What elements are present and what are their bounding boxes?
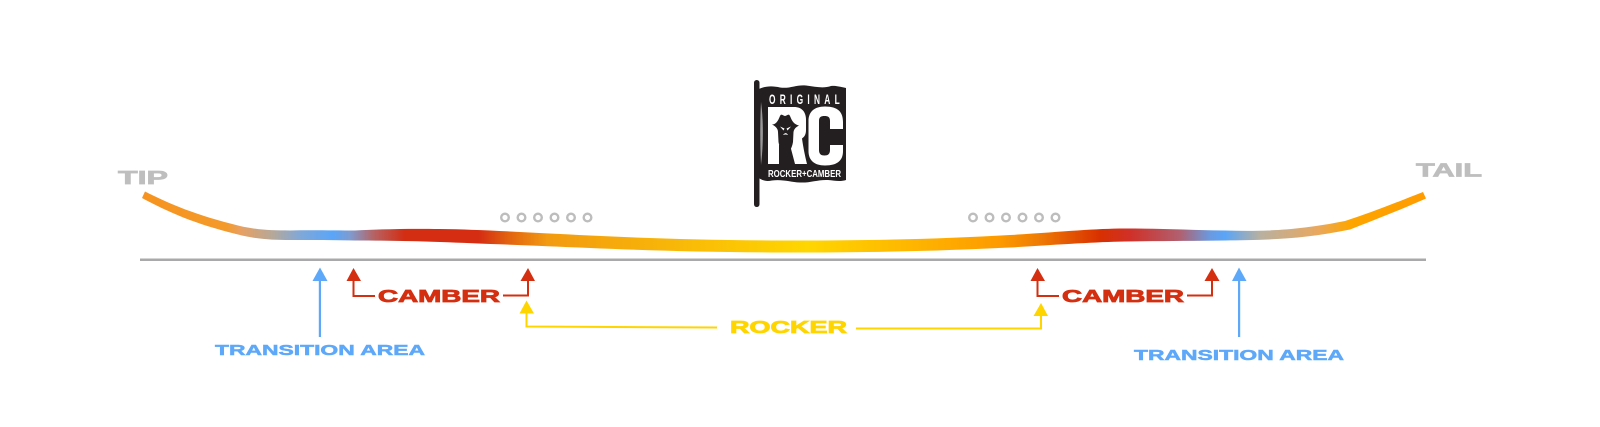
flag body <box>759 85 846 183</box>
flag pole <box>754 80 760 207</box>
arrow: left camber inner <box>503 268 535 296</box>
arrow: left camber outer <box>346 268 375 296</box>
arrow: left transition <box>312 268 328 337</box>
board profile band <box>142 192 1426 252</box>
label: left transition area: TRANSITION AREA <box>215 343 426 359</box>
arrow: rocker right <box>856 303 1048 328</box>
arrow: right camber outer <box>1187 268 1220 296</box>
label: left camber: CAMBER <box>378 286 501 306</box>
baseline <box>140 258 1426 261</box>
logo letter R <box>768 107 807 164</box>
logo word: original: ORIGINAL <box>769 93 840 108</box>
logo word: rocker+camber: ROCKER+CAMBER <box>768 168 841 180</box>
left dots <box>501 214 591 221</box>
label: rocker: ROCKER <box>730 317 848 337</box>
logo letter C <box>808 106 843 166</box>
label: right camber: CAMBER <box>1062 286 1185 306</box>
right dots <box>969 214 1059 221</box>
label: tail: TAIL <box>1416 160 1482 180</box>
logo flag <box>754 80 846 207</box>
arrow: rocker left <box>520 300 717 328</box>
label: right transition area: TRANSITION AREA <box>1134 348 1345 364</box>
arrow: right camber inner <box>1030 268 1059 296</box>
flag fold highlight <box>760 102 763 165</box>
arrow: right transition <box>1232 268 1246 337</box>
pirate icon <box>772 115 799 157</box>
label: tip: TIP <box>118 167 168 188</box>
